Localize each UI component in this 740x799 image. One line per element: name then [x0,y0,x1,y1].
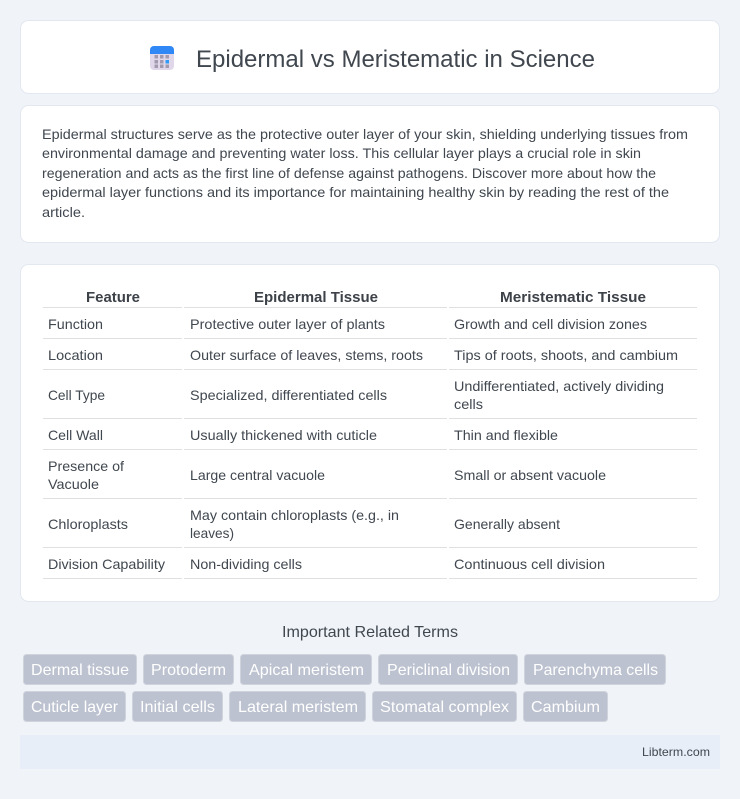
panel: comparison table [20,264,720,602]
row: cell wall [48,427,558,443]
title: Epidermal vs Meristematic in Science [196,46,595,73]
text block: introduction: article. [42,204,85,220]
tag: Dermal tissue: Dermal tissue [31,662,129,679]
row: location: Outer surface of leaves, stems, roots [190,347,423,363]
row: cell type: cells [454,396,483,412]
tag: Cuticle layer [24,692,126,722]
footer: Libterm.com [642,745,710,759]
footer [20,735,720,769]
row: cell wall: Usually thickened with cuticle [190,427,377,443]
text block: introduction: Epidermal structures serve as the protective outer layer of your skin, shielding underlying tissues from [42,126,688,142]
icon: calendar [150,46,174,70]
text block: introduction: environmental damage and preventing water loss. This cellular layer plays a crucial role in skin [42,145,641,161]
text block: introduction: regeneration and acts as the first line of defense against pathogens. Discover more about how the [42,165,656,181]
row: chloroplasts: May contain chloroplasts (e.g., in [190,507,399,523]
row: presence of vacuole: Presence of [48,458,124,474]
row: presence of vacuole: Vacuole [48,476,99,492]
tag: Parenchyma cells [524,654,666,684]
tag: Lateral meristem [230,692,366,722]
row: chloroplasts: Generally absent [454,516,560,532]
table header row [86,289,646,306]
tag: Parenchyma cells: Parenchyma cells [533,662,658,679]
table header row: Meristematic Tissue [500,289,646,306]
tag: Apical meristem: Apical meristem [249,662,364,679]
table header row: Feature [86,289,140,306]
row: chloroplasts: Chloroplasts [48,516,128,532]
related term tags [24,654,666,722]
row: function [48,316,647,332]
row: presence of vacuole [48,458,606,492]
tag: Stomatal complex: Stomatal complex [380,699,509,716]
row: location: Tips of roots, shoots, and cambium [454,347,678,363]
tag: Initial cells [132,692,222,722]
heading: related terms: Important Related Terms [282,624,458,641]
row: chloroplasts [48,507,560,541]
row: cell type [48,378,664,412]
tag: Periclinal division [378,654,518,684]
row: function: Function [48,316,103,332]
table header row: Epidermal Tissue [254,289,378,306]
tag: Dermal tissue [24,654,136,684]
tag: Lateral meristem: Lateral meristem [238,699,358,716]
tag: Protoderm: Protoderm [151,662,226,679]
panel: header [20,20,720,94]
row: location: Location [48,347,103,363]
row: function: Protective outer layer of plants [190,316,385,332]
text block: introduction: epidermal layer functions and its importance for maintaining healthy skin by reading the rest of the [42,184,669,200]
tag: Cambium: Cambium [531,699,600,716]
row: cell wall: Cell Wall [48,427,103,443]
row: presence of vacuole: Large central vacuole [190,467,325,483]
tag: Initial cells: Initial cells [140,699,215,716]
row: cell type: Cell Type [48,387,105,403]
row: location [48,347,678,363]
row: chloroplasts: leaves) [190,525,234,541]
row: division capability: Division Capability [48,556,165,572]
row: division capability: Continuous cell division [454,556,605,572]
tag: Apical meristem [240,654,372,684]
tag: Periclinal division: Periclinal division [387,662,510,679]
row: division capability: Non-dividing cells [190,556,302,572]
tag: Cuticle layer: Cuticle layer [31,699,119,716]
row: cell wall: Thin and flexible [454,427,558,443]
row: cell type: Specialized, differentiated cells [190,387,387,403]
row: function: Growth and cell division zones [454,316,647,332]
tag: Stomatal complex [372,692,516,722]
panel: introduction [20,106,720,242]
row: division capability [48,556,605,572]
tag: Protoderm [144,654,234,684]
text block: introduction [42,126,688,220]
row: cell type: Undifferentiated, actively dividing [454,378,664,394]
row: presence of vacuole: Small or absent vacuole [454,467,606,483]
tag: Cambium [524,692,608,722]
